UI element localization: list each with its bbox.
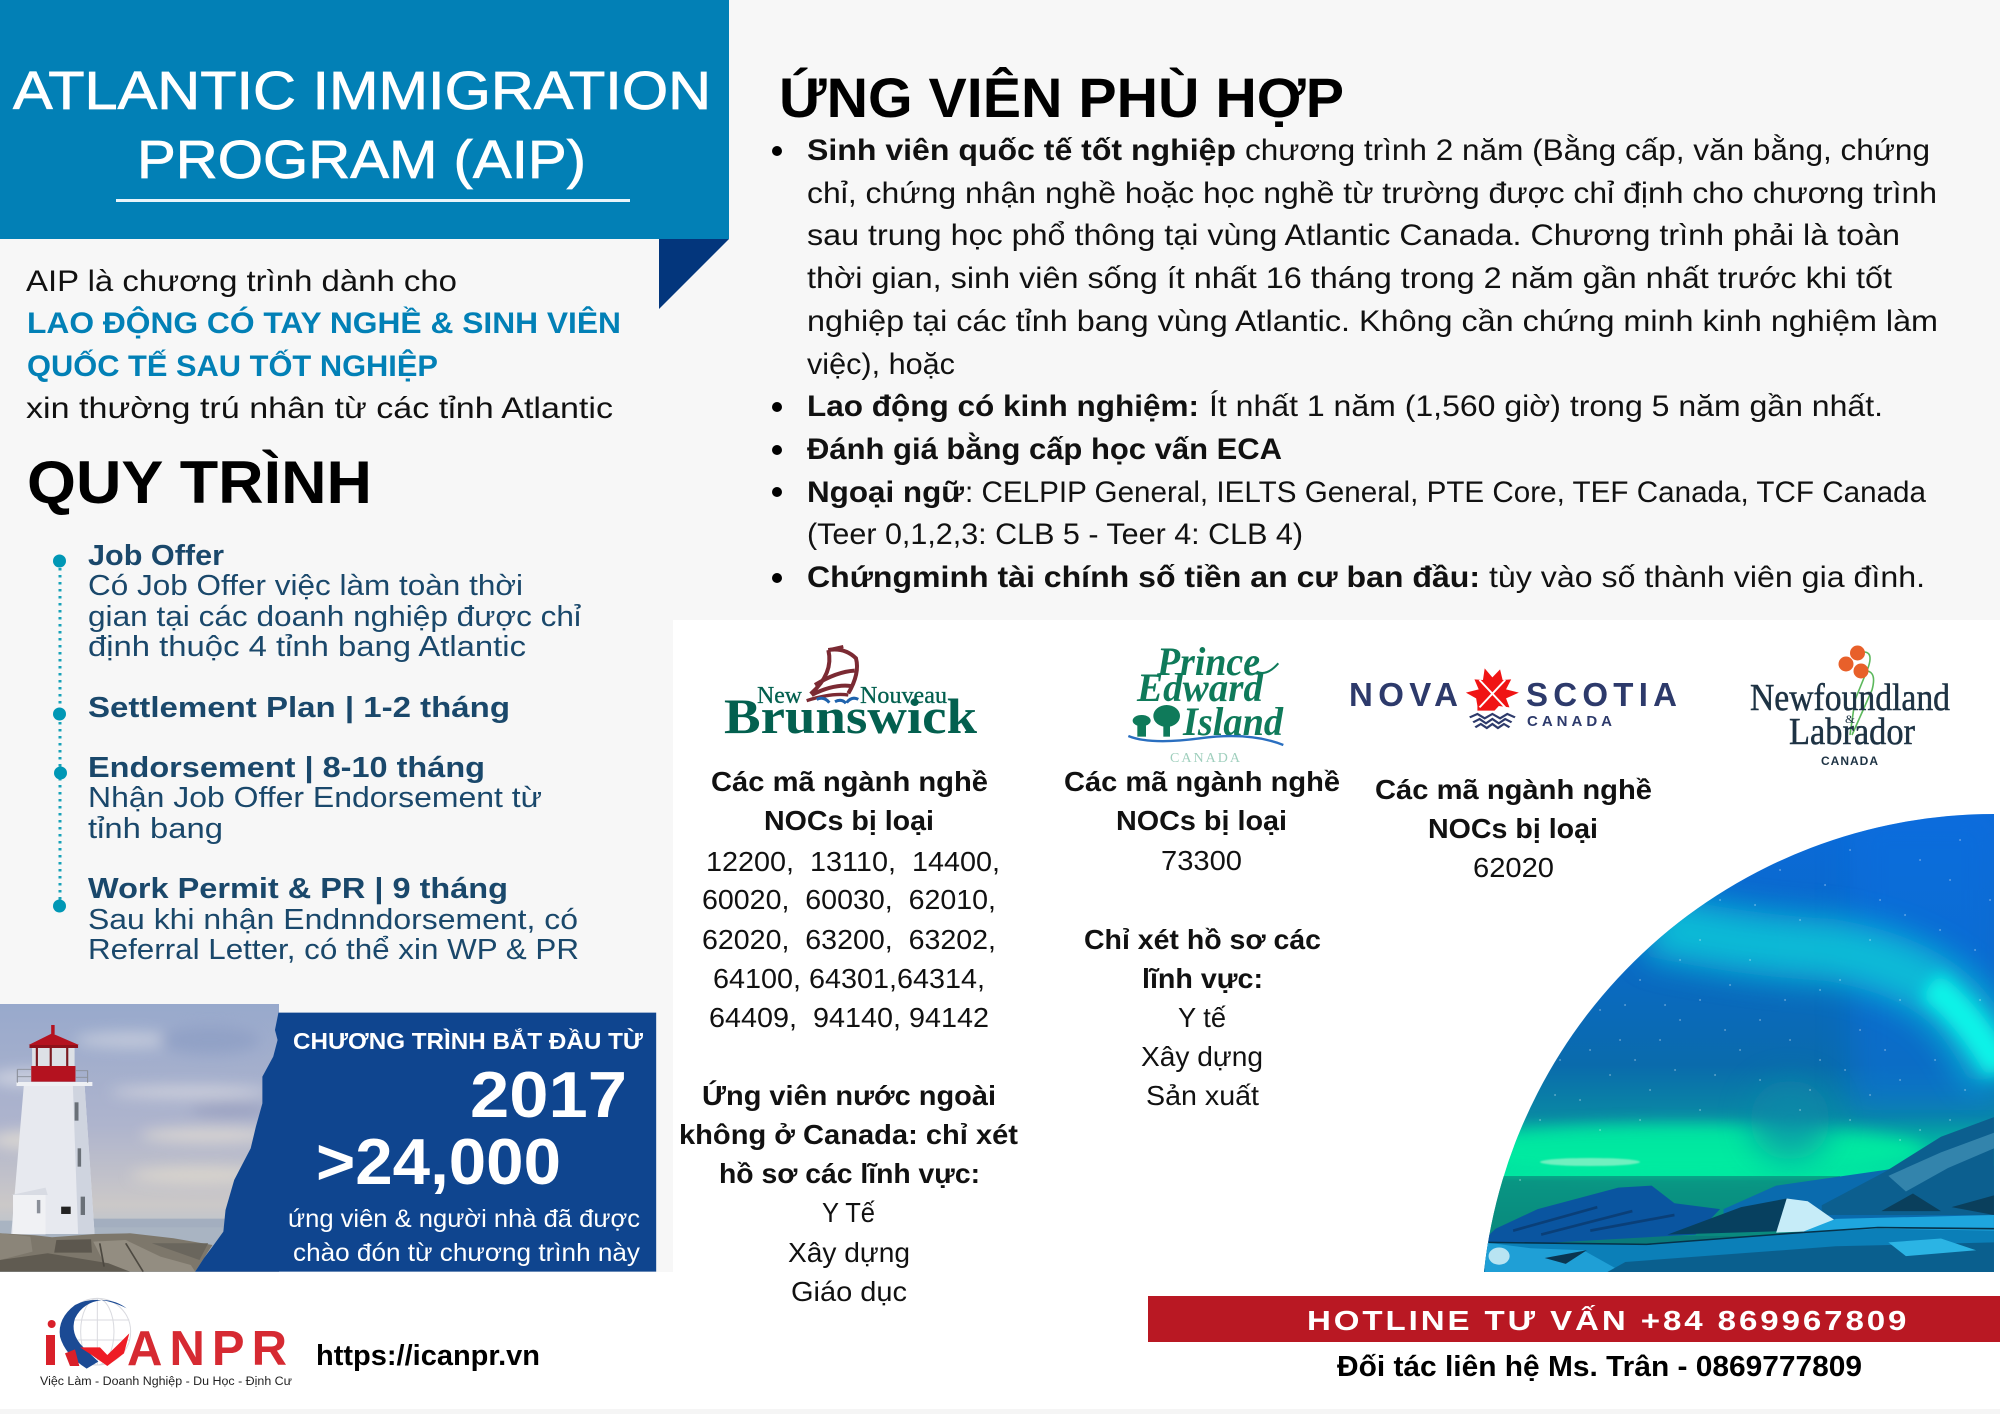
panel: New Brunswick excluded codes: hồ sơ các lĩnh vực: [719,1158,980,1189]
bullet list: nghiệp tại các tỉnh bang vùng Atlantic. Không cần chứng minh kinh nghiệm làm [807,305,1938,338]
logo: Prince Edward Island: Edward [1136,665,1264,710]
step: endorsement: tỉnh bang [88,813,223,845]
panel: suitable candidates [772,66,1938,594]
panel: Prince Edward Island excluded codes: lĩnh vực: [1142,963,1263,994]
timeline dots [53,554,67,912]
bullet list: việc), hoặc [807,348,955,381]
bullet list: sau trung học phổ thông tại vùng Atlantic Canada. Chương trình phải là toàn [807,219,1900,252]
right mountain [1822,1117,1994,1215]
intro text: QUỐC TẾ SAU TỐT NGHIỆP [27,349,438,383]
dark hill and snow pile [1667,1199,1801,1235]
step: settlement plan: Settlement Plan | 1-2 tháng [88,692,510,724]
title: ATLANTIC IMMIGRATION [13,61,711,121]
step: job offer: định thuộc 4 tỉnh bang Atlantic [88,631,526,663]
bullet list: Đánh giá bằng cấp học vấn ECA [807,432,1282,466]
logo: Newfoundland and Labrador [1750,646,1950,768]
heading: ỨNG VIÊN PHÙ HỢP [779,66,1344,129]
panel: Prince Edward Island excluded codes: Y tế [1178,1002,1226,1033]
lantern [31,1066,75,1082]
panel: New Brunswick excluded codes: 60020, 60030, 62010, [702,884,996,915]
panel: New Brunswick excluded codes: Các mã ngành nghề [711,766,988,797]
logo: Nova Scotia: CANADA [1527,713,1612,730]
sea [0,1220,224,1247]
number: 24,000: >24,000 [316,1125,561,1198]
step: job offer: Có Job Offer việc làm toàn thời [88,570,523,602]
bullet list: chương trình 2 năm (Bằng cấp, văn bằng, chứng [1245,134,1930,167]
logo: New Brunswick: Brunswick [724,688,977,744]
far snowfield [1724,1166,1994,1220]
logo: iCANPR [40,1298,292,1388]
bullet list: Ngoại ngữ [807,476,964,509]
website link: https://icanpr.vn [316,1340,540,1372]
bullet list: chỉ, chứng nhận nghề hoặc học nghề từ trường được chỉ định cho chương trình [807,177,1937,210]
panel: process timeline [53,540,582,966]
bullet list: Lao động có kinh nghiệm: [807,390,1199,423]
step: work permit and PR: Sau khi nhận Endnndorsement, có [88,904,578,936]
logo: Nova Scotia: SCOTIA [1526,676,1677,713]
title underline [116,199,630,202]
logo: New Brunswick: New [757,683,803,709]
bullet list [772,134,1938,594]
step: job offer [88,540,582,663]
intro text: AIP là chương trình dành cho [26,265,457,298]
panel: Nova Scotia excluded codes [1375,774,1652,883]
step: work permit and PR [88,873,579,966]
panel: New Brunswick excluded codes: không ở Canada: chỉ xét [679,1119,1018,1150]
stat caption: chào đón từ chương trình này [293,1239,641,1267]
bullet list: tùy vào số thành viên gia đình. [1489,561,1925,594]
step: job offer: Job Offer [88,540,224,572]
red swoosh [80,1333,129,1366]
logo: New Brunswick [724,647,977,744]
panel: Prince Edward Island excluded codes: Các mã ngành nghề [1064,766,1340,797]
panel: New Brunswick excluded codes: 12200, 13110, 14400, [706,846,1000,877]
step: endorsement: Endorsement | 8-10 tháng [88,752,485,784]
bullet list: Sinh viên quốc tế tốt nghiệp [807,134,1236,167]
bullet list: Ít nhất 1 năm (1,560 giờ) trong 5 năm gần nhất. [1209,390,1883,423]
logo: Nova Scotia [1349,668,1677,730]
logo: New Brunswick: Nouveau [860,683,947,709]
torn blue background [195,1013,656,1272]
stat caption: ứng viên & người nhà đã được [288,1205,640,1233]
blue crescent and hand [60,1300,127,1369]
step: work permit and PR: Referral Letter, có thể xin WP & PR [88,934,579,966]
step: job offer: gian tại các doanh nghiệp được chỉ [88,601,582,633]
panel: New Brunswick excluded codes: Y Tế [822,1197,875,1228]
step: endorsement: Nhận Job Offer Endorsement từ [88,782,542,814]
panel: Nova Scotia excluded codes: Các mã ngành nghề [1375,774,1652,805]
panel: New Brunswick excluded codes [679,766,1018,1307]
bullet list: (Teer 0,1,2,3: CLB 5 - Teer 4: CLB 4) [807,518,1303,551]
logo: Prince Edward Island: CANADA [1170,751,1241,766]
logo: Prince Edward Island: Island [1182,699,1284,744]
step: work permit and PR: Work Permit & PR | 9 tháng [88,873,508,905]
panel: Prince Edward Island excluded codes: Chỉ xét hồ sơ các [1084,924,1321,955]
photo: northern lights [1484,814,1994,1272]
logo: Prince Edward Island [1128,639,1284,766]
logo: Newfoundland and Labrador: CANADA [1821,754,1878,768]
footer strip [0,1409,2000,1414]
panel: program statistics [195,1013,656,1272]
intro text: xin thường trú nhân từ các tỉnh Atlantic [26,392,613,425]
hotline bar [1148,1296,2000,1342]
logo: Newfoundland and Labrador: Newfoundland [1750,677,1950,719]
letter i [48,1320,56,1328]
panel: Prince Edward Island excluded codes: Xây dựng [1141,1041,1263,1072]
bullet list: Chứngminh tài chính số tiền an cư ban đầu: [807,561,1480,594]
panel: Prince Edward Island excluded codes: 73300 [1161,845,1242,876]
bullet list: : CELPIP General, IELTS General, PTE Core, TEF Canada, TCF Canada [965,476,1926,509]
banner fold [659,239,729,309]
bullet list: thời gian, sinh viên sống ít nhất 16 tháng trong 2 năm gần nhất trước khi tốt [807,262,1893,295]
logo: Prince Edward Island: Prince [1156,639,1260,684]
globe [64,1298,131,1365]
step: endorsement [88,752,542,845]
left ridge [1485,1186,1720,1246]
partner contact: Đối tác liên hệ Ms. Trân - 0869777809 [1337,1351,1862,1383]
photo: lighthouse [0,1004,280,1272]
panel: Prince Edward Island excluded codes [1064,766,1340,1111]
title: PROGRAM (AIP) [137,130,586,190]
panel: Prince Edward Island excluded codes: Sản xuất [1146,1080,1259,1111]
logo: Newfoundland and Labrador: & [1845,712,1856,726]
panel: New Brunswick excluded codes: Xây dựng [788,1237,910,1268]
number: 2017: 2017 [470,1058,627,1131]
panel: New Brunswick excluded codes: Ứng viên nước ngoài [702,1080,996,1111]
foreground [1483,1228,1994,1274]
logo: Nova Scotia: NOVA [1349,676,1458,713]
panel: New Brunswick excluded codes: NOCs bị loại [764,805,934,836]
panel: Prince Edward Island excluded codes: NOCs bị loại [1116,805,1287,836]
rocks [0,1233,213,1272]
intro text [26,265,621,425]
panel: Nova Scotia excluded codes: 62020 [1473,852,1554,883]
logo: iCANPR: ANPR [127,1322,287,1376]
hotline bar: HOTLINE TƯ VẤN +84 869967809 [1307,1304,1906,1336]
panel: New Brunswick excluded codes: 64409, 94140, 94142 [709,1002,989,1033]
start label: CHƯƠNG TRÌNH BẮT ĐẦU TỪ [293,1027,644,1054]
stat caption [288,1205,641,1267]
title [13,61,711,190]
logo: iCANPR: Việc Làm - Doanh Nghiệp - Du Học - Định Cư [40,1376,292,1388]
logo: Newfoundland and Labrador: Labrador [1789,711,1915,753]
panel: New Brunswick excluded codes: Giáo dục [791,1276,907,1307]
panel: New Brunswick excluded codes: 64100, 64301,64314, [713,963,985,994]
panel: New Brunswick excluded codes: 62020, 63200, 63202, [702,924,996,955]
intro text: LAO ĐỘNG CÓ TAY NGHỀ & SINH VIÊN [27,306,621,340]
heading: process: QUY TRÌNH [27,449,372,516]
tower [11,1085,95,1234]
panel: Nova Scotia excluded codes: NOCs bị loại [1428,813,1598,844]
panel: title banner [0,0,729,309]
